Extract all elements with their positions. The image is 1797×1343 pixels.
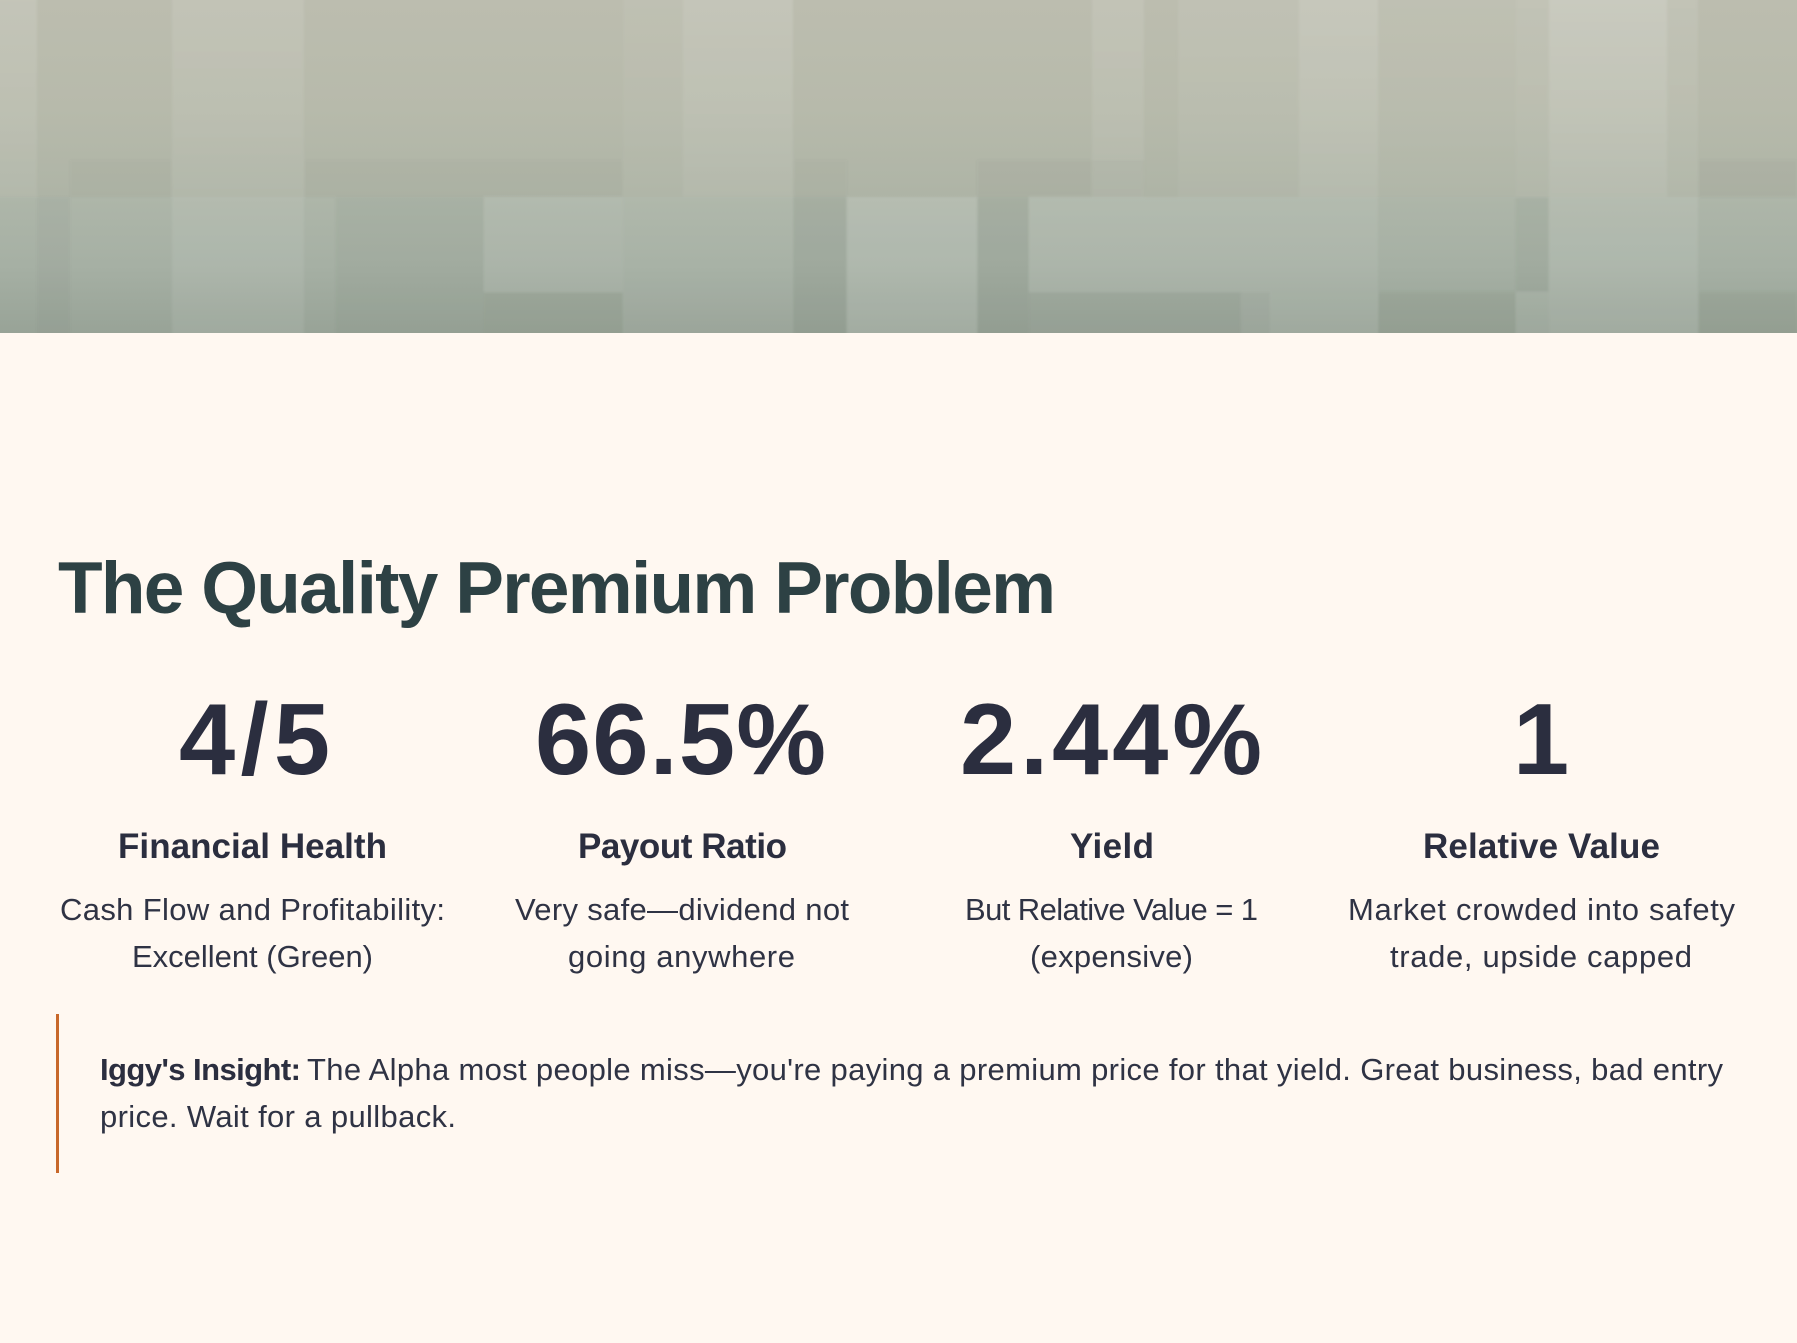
description: yield bbox=[965, 892, 1258, 974]
label: financial health: Financial Health bbox=[118, 827, 387, 866]
callout text bbox=[100, 1052, 1724, 1134]
description: financial health bbox=[60, 892, 445, 974]
description: payout ratio bbox=[515, 892, 849, 974]
metric: relative value bbox=[1348, 684, 1736, 974]
description: financial health: Cash Flow and Profitability: bbox=[60, 892, 445, 927]
callout text: price. Wait for a pullback. bbox=[100, 1099, 456, 1134]
value: 66.5%: 66.5% bbox=[535, 684, 826, 796]
metric: payout ratio bbox=[515, 684, 849, 974]
callout accent bar bbox=[56, 1014, 59, 1173]
callout: Iggy's insight bbox=[56, 1014, 1724, 1173]
value: 1: 1 bbox=[1513, 684, 1569, 796]
description: relative value: Market crowded into safety bbox=[1348, 892, 1736, 927]
description: financial health: Excellent (Green) bbox=[132, 939, 373, 974]
description: yield: (expensive) bbox=[1030, 939, 1193, 974]
label: yield: Yield bbox=[1070, 827, 1154, 866]
callout lead-in: Iggy's Insight: bbox=[100, 1052, 301, 1087]
title: The Quality Premium Problem bbox=[58, 548, 1056, 629]
description: yield: But Relative Value = 1 bbox=[965, 892, 1258, 927]
description: payout ratio: Very safe—dividend not bbox=[515, 892, 849, 927]
metric: financial health bbox=[60, 684, 445, 974]
value: 2.44%: 2.44% bbox=[960, 684, 1262, 796]
description: relative value bbox=[1348, 892, 1736, 974]
value: 4/5: 4/5 bbox=[179, 684, 330, 796]
banner: blurred sage abstract image bbox=[0, 0, 1797, 347]
description: relative value: trade, upside capped bbox=[1390, 939, 1692, 974]
callout text: The Alpha most people miss—you're paying a premium price for that yield. Great business, bad entry bbox=[307, 1052, 1724, 1087]
label: relative value: Relative Value bbox=[1423, 827, 1660, 866]
metric: yield bbox=[960, 684, 1262, 974]
description: payout ratio: going anywhere bbox=[568, 939, 795, 974]
label: payout ratio: Payout Ratio bbox=[578, 827, 787, 866]
